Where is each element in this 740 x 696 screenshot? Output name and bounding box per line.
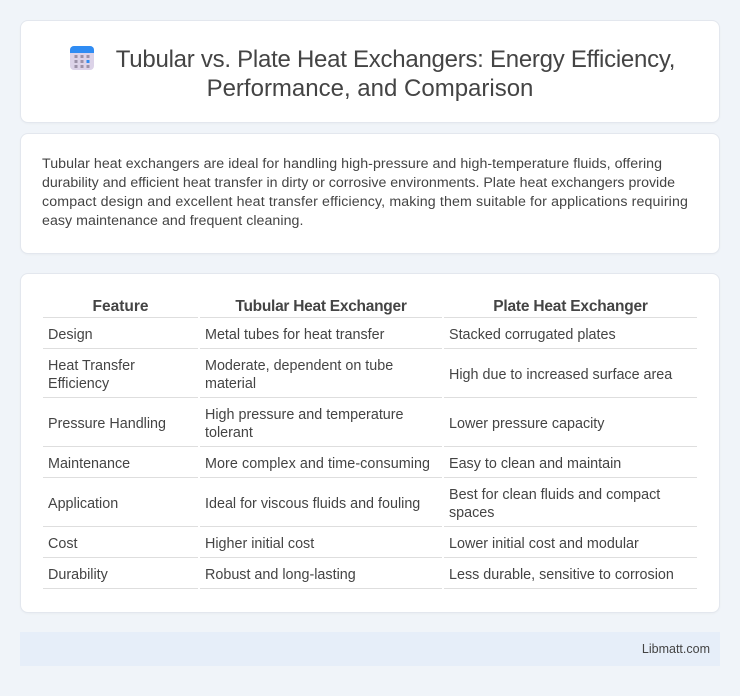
text block: introduction: durability and efficient heat transfer in dirty or corrosive environments. Plate heat exchangers provide: [42, 175, 675, 191]
footer credit: Libmatt.com: [642, 642, 710, 656]
row: cost: Cost: [48, 536, 78, 552]
row: maintenance: More complex and time-consuming: [205, 456, 430, 472]
column headers: [92, 298, 648, 315]
row: pressure handling: tolerant: [205, 425, 253, 441]
panel: comparison table card: [20, 273, 720, 613]
row: application: [48, 487, 660, 521]
row: maintenance: Easy to clean and maintain: [449, 456, 621, 472]
row: heat transfer efficiency: Heat Transfer: [48, 358, 135, 374]
column headers: Feature: [92, 298, 148, 315]
row: durability: Durability: [48, 567, 108, 583]
title: Tubular vs. Plate Heat Exchangers: Energy Efficiency,: [116, 46, 675, 73]
row: design: Design: [48, 327, 93, 343]
icon: calendar: [70, 46, 94, 70]
row: heat transfer efficiency: Efficiency: [48, 376, 109, 392]
row: durability: Robust and long-lasting: [205, 567, 356, 583]
row: application: Application: [48, 496, 118, 512]
row: heat transfer efficiency: material: [205, 376, 256, 392]
row: heat transfer efficiency: [48, 358, 672, 392]
panel: introduction card: [20, 133, 720, 254]
text block: introduction: compact design and excellent heat transfer efficiency, making them suitable for applications requiring: [42, 194, 688, 210]
text block: introduction: easy maintenance and frequent cleaning.: [42, 213, 303, 229]
row: maintenance: [48, 456, 621, 472]
title: Performance, and Comparison: [207, 75, 533, 102]
row: design: Metal tubes for heat transfer: [205, 327, 384, 343]
column headers: Plate Heat Exchanger: [493, 298, 648, 315]
row: heat transfer efficiency: High due to increased surface area: [449, 367, 672, 383]
footer: [20, 632, 720, 666]
row: durability: [48, 567, 674, 583]
text block: introduction: [42, 156, 688, 229]
row: maintenance: Maintenance: [48, 456, 130, 472]
row: cost: Higher initial cost: [205, 536, 314, 552]
row: application: Best for clean fluids and compact: [449, 487, 660, 503]
panel: title card: [20, 20, 720, 123]
row: cost: [48, 536, 639, 552]
title: [116, 46, 675, 102]
column headers: Tubular Heat Exchanger: [235, 298, 407, 315]
row: pressure handling: Pressure Handling: [48, 416, 166, 432]
row: cost: Lower initial cost and modular: [449, 536, 639, 552]
row: pressure handling: [48, 407, 604, 441]
row: design: [48, 327, 616, 343]
row: design: Stacked corrugated plates: [449, 327, 616, 343]
row: application: spaces: [449, 505, 494, 521]
row: pressure handling: Lower pressure capacity: [449, 416, 604, 432]
row: heat transfer efficiency: Moderate, dependent on tube: [205, 358, 393, 374]
text block: introduction: Tubular heat exchangers are ideal for handling high-pressure and high-temperature fluids, offering: [42, 156, 662, 172]
row: durability: Less durable, sensitive to corrosion: [449, 567, 674, 583]
row: pressure handling: High pressure and temperature: [205, 407, 404, 423]
row: application: Ideal for viscous fluids and fouling: [205, 496, 420, 512]
